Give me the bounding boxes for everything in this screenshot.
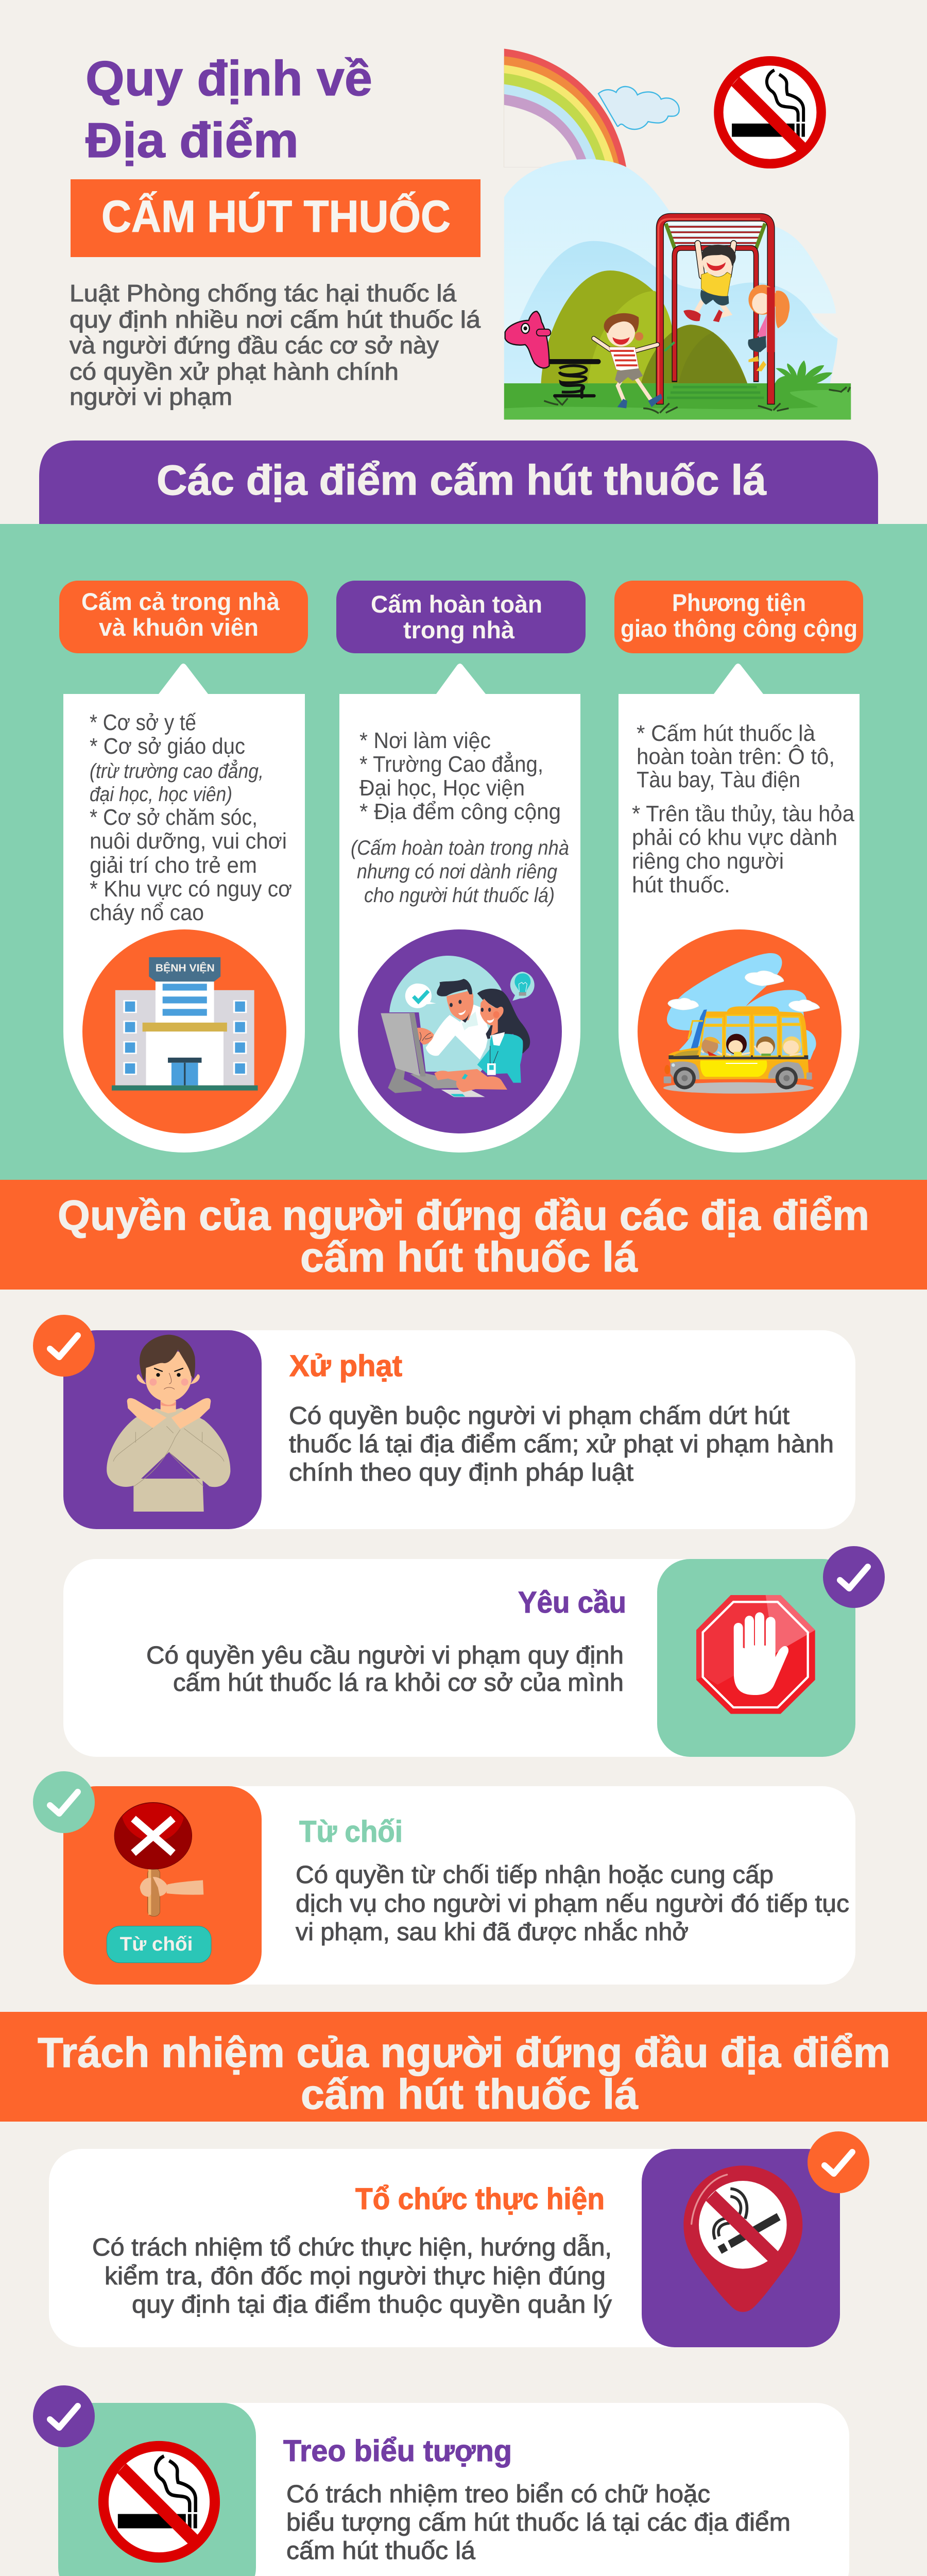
list: fully indoors: (Cấm hoàn toàn trong nhà: [351, 837, 569, 859]
section heading: rights: [0, 1180, 927, 1290]
pill: indoor and grounds: Cấm cả trong nhà: [81, 588, 280, 615]
list: indoor and grounds: * Cơ sở chăm sóc,: [90, 805, 258, 830]
check badge: [808, 2131, 869, 2193]
children: [701, 1034, 801, 1056]
section heading: responsibilities: cấm hút thuốc lá: [301, 2071, 638, 2118]
body text: cấm hút thuốc lá ra khỏi cơ sở của mình: [173, 1669, 624, 1697]
hands: [434, 1069, 507, 1092]
card: fully indoors: [339, 664, 580, 1153]
heading: Tổ chức thực hiện: Tổ chức thực hiện: [355, 2182, 605, 2216]
body text: Có trách nhiệm treo biển có chữ hoặc: [286, 2481, 710, 2508]
section heading bar: Các địa điểm cấm hút thuốc lá: [39, 440, 878, 524]
list: public transport: Tàu bay, Tàu điện: [637, 767, 800, 792]
cloud: [598, 87, 679, 129]
heading: Yêu cầu: Yêu cầu: [518, 1586, 626, 1619]
woman: [477, 989, 530, 1083]
icon: hospital: [112, 957, 258, 1091]
hanging boy: [683, 244, 736, 322]
panel: places background: [0, 524, 927, 1180]
list: fully indoors: nhưng có nơi dành riêng: [357, 860, 557, 883]
icon: no smoking sign: [98, 2441, 220, 2563]
bush: [775, 360, 832, 384]
list: indoor and grounds: đại học, học viên): [90, 783, 232, 806]
panel: Từ chối: [33, 1771, 855, 1985]
body text: Có quyền yêu cầu người vi phạm quy định: [146, 1642, 624, 1669]
climbing frame: [659, 217, 771, 404]
body text: quy định tại địa điểm thuộc quyền quản lý: [132, 2291, 612, 2318]
body text: [92, 2233, 612, 2318]
icon: no smoking sign top: [714, 56, 826, 168]
check badge: [33, 1315, 95, 1377]
check badge: [823, 1546, 885, 1608]
list: fully indoors: [351, 728, 569, 907]
section heading: rights: Quyền của người đứng đầu các địa điểm: [58, 1192, 869, 1239]
title: Quy định về Địa điểm: [85, 51, 372, 168]
spring horse: [505, 311, 598, 397]
heading: Treo biểu tượng: Treo biểu tượng: [283, 2434, 512, 2468]
title: Quy định về Địa điểm: Địa điểm: [85, 113, 299, 168]
section heading: responsibilities: [0, 2012, 927, 2122]
intro paragraph: có quyền xử phạt hành chính: [70, 358, 399, 385]
bus body: [668, 1006, 809, 1079]
girl: [748, 285, 789, 371]
section heading bar: Các địa điểm cấm hút thuốc lá: Các địa điểm cấm hút thuốc lá: [157, 457, 766, 504]
body text: [146, 1642, 624, 1697]
card: public transport: [619, 664, 860, 1153]
heading: Xử phạt: Xử phạt: [289, 1349, 402, 1383]
computer: [381, 1013, 485, 1097]
intro paragraph: người vi phạm: [70, 383, 232, 410]
body text: biểu tượng cấm hút thuốc lá tại các địa điểm: [286, 2509, 791, 2536]
body text: Có trách nhiệm tổ chức thực hiện, hướng dẫn,: [92, 2233, 612, 2261]
background hills: [504, 159, 837, 383]
panel: Treo biểu tượng: [33, 2385, 849, 2576]
windows: [699, 1015, 803, 1056]
lower panel: [700, 1060, 767, 1077]
list: fully indoors: * Địa đểm công cộng: [359, 799, 561, 824]
body text: thuốc lá tại địa điểm cấm; xử phạt vi phạm hành: [289, 1431, 834, 1458]
list: fully indoors: * Trường Cao đẳng,: [359, 751, 543, 777]
intro paragraph: [70, 280, 480, 410]
body text: dịch vụ cho người vi phạm nếu người đó tiếp tục: [296, 1890, 849, 1918]
list: public transport: * Cấm hút thuốc là: [637, 721, 816, 746]
title: Quy định về Địa điểm: Quy định về: [85, 51, 372, 106]
speech check: [405, 984, 436, 1008]
pill: public transport: [614, 581, 863, 653]
icon: man crossing arms: [107, 1335, 230, 1512]
body text: [296, 1861, 849, 1946]
intro paragraph: quy định nhiều nơi cấm hút thuốc lá: [70, 306, 480, 333]
clouds: [668, 971, 820, 1012]
list: indoor and grounds: * Cơ sở y tế: [90, 710, 196, 735]
body text: [286, 2481, 791, 2565]
list: public transport: [632, 721, 854, 897]
body text: Có quyền buộc người vi phạm chấm dứt hút: [289, 1402, 789, 1430]
pill: fully indoors: trong nhà: [403, 616, 515, 643]
list: indoor and grounds: [90, 710, 292, 925]
icon: hospital: BỆNH VIỆN: [156, 961, 215, 974]
card: indoor and grounds: [63, 664, 305, 1153]
ground: [504, 383, 851, 419]
standing boy: [594, 313, 662, 409]
list: fully indoors: * Nơi làm việc: [359, 728, 491, 753]
heading: Từ chối: Từ chối: [299, 1815, 403, 1849]
pill: indoor and grounds: [59, 581, 308, 653]
title banner: cấm hút thuốc: [71, 179, 480, 257]
body text: vi phạm, sau khi đã được nhắc nhở: [296, 1918, 689, 1946]
section heading: rights: cấm hút thuốc lá: [300, 1234, 638, 1281]
section heading: responsibilities: Trách nhiệm của người đứng đầu địa điểm: [38, 2029, 890, 2076]
icon: no smoking location pin: [683, 2165, 802, 2312]
list: public transport: riêng cho người: [632, 849, 784, 874]
list: public transport: hút thuốc.: [632, 872, 730, 897]
list: indoor and grounds: nuôi dưỡng, vui chơi: [90, 828, 287, 854]
icon: hand holding x sign: Từ chối: [120, 1934, 193, 1955]
icon: hand holding x sign: [107, 1802, 211, 1963]
panel: Yêu cầu: [63, 1546, 885, 1757]
check badge: [33, 2385, 95, 2447]
icon: office workers: [381, 956, 535, 1097]
body text: [289, 1402, 834, 1486]
icon: school bus: [663, 953, 820, 1094]
panel: Xử phạt: [33, 1315, 855, 1529]
speech bulb: [510, 972, 535, 1001]
list: fully indoors: Đại học, Học viện: [359, 775, 525, 801]
body text: kiểm tra, đôn đốc mọi người thực hiện đúng: [105, 2263, 606, 2290]
pill: public transport: giao thông công cộng: [621, 615, 857, 642]
list: indoor and grounds: cháy nổ cao: [90, 900, 204, 925]
list: public transport: * Trên tầu thủy, tàu hỏa: [632, 801, 854, 826]
list: indoor and grounds: * Cơ sở giáo dục: [90, 734, 245, 759]
list: public transport: phải có khu vực dành: [632, 825, 837, 850]
list: indoor and grounds: * Khu vực có nguy cơ: [90, 876, 292, 902]
pill: fully indoors: Cấm hoàn toàn: [371, 590, 542, 618]
panel: Tổ chức thực hiện: [49, 2131, 869, 2347]
list: fully indoors: cho người hút thuốc lá): [364, 884, 555, 907]
pill: fully indoors: [336, 581, 586, 653]
pill: public transport: Phương tiện: [672, 589, 806, 616]
list: indoor and grounds: giải trí cho trẻ em: [90, 853, 257, 878]
pill: indoor and grounds: và khuôn viên: [99, 614, 259, 641]
check badge: [33, 1771, 95, 1833]
body text: Có quyền từ chối tiếp nhận hoặc cung cấp: [296, 1861, 774, 1889]
rainbow: [504, 49, 626, 167]
intro paragraph: và người đứng đầu các cơ sở này: [70, 332, 439, 359]
intro paragraph: Luật Phòng chống tác hại thuốc lá: [70, 280, 456, 307]
man: [417, 979, 489, 1060]
title banner: cấm hút thuốc: CẤM HÚT THUỐC: [101, 192, 451, 242]
body text: chính theo quy định pháp luật: [289, 1459, 633, 1486]
list: indoor and grounds: (trừ trường cao đẳng,: [90, 759, 264, 783]
icon: stop hand: [696, 1595, 815, 1714]
body text: cấm hút thuốc lá: [286, 2537, 475, 2565]
list: public transport: hoàn toàn trên: Ô tô,: [637, 743, 835, 769]
wheels and arches: [664, 1061, 812, 1089]
illustration: playground with rainbow: [504, 49, 851, 419]
